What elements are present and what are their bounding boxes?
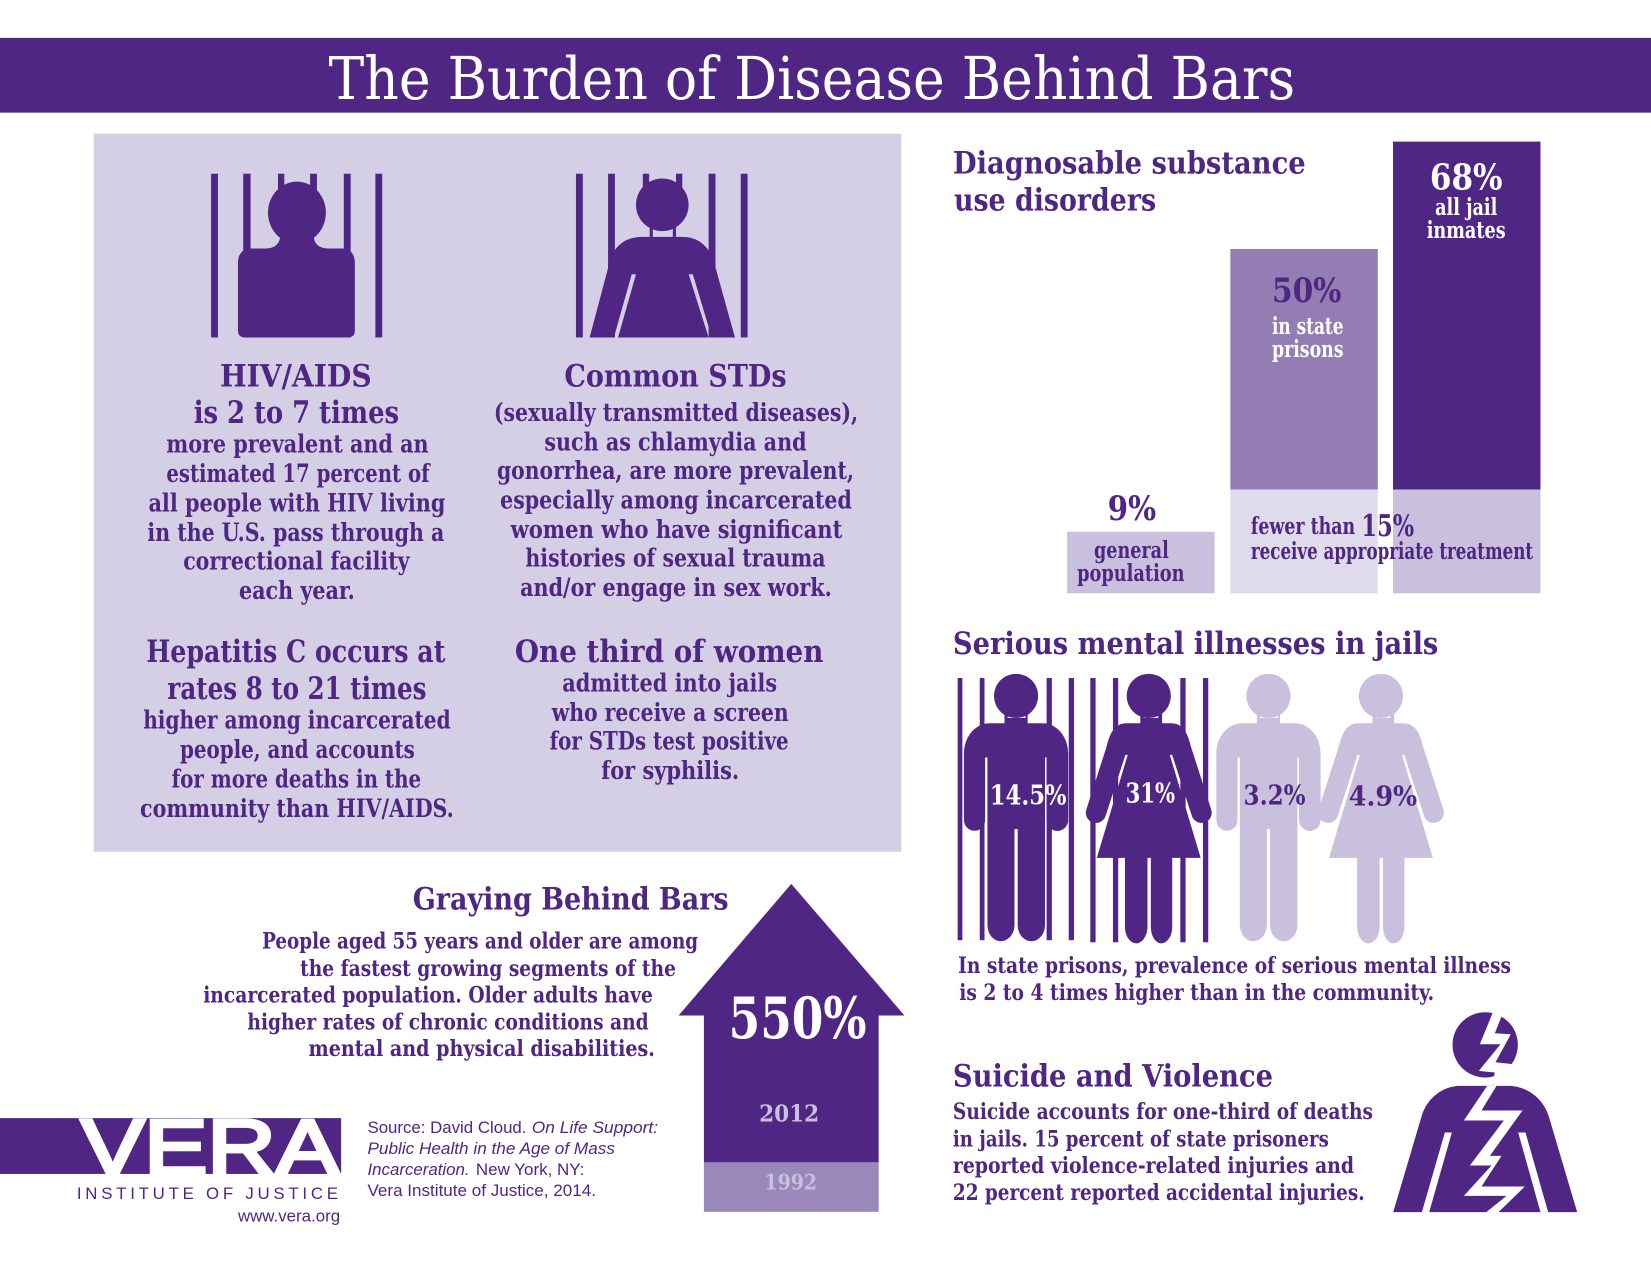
source citation: Public Health in the Age of Mass <box>367 1140 615 1158</box>
text block: common STDs: and/or engage in sex work. <box>520 573 832 602</box>
header banner <box>0 38 1651 113</box>
bar chart: substance use disorders <box>1067 142 1540 593</box>
bar: all jail inmates 68% <box>1393 142 1540 593</box>
icon: community man 3.2% <box>1216 674 1321 941</box>
heading: substance use disorders: use disorders <box>954 183 1156 219</box>
text block: suicide and violence: Suicide accounts for one-third of deaths <box>953 1099 1373 1125</box>
panel: disease prevalence <box>94 134 901 852</box>
callout: fewer than 15% treated <box>1251 508 1533 565</box>
arrow: 550% growth: 1992 <box>764 1170 817 1195</box>
arrow: 550% growth: 2012 <box>759 1100 819 1127</box>
text block: graying behind bars: higher rates of chronic conditions and <box>247 1010 649 1036</box>
icon: female prisoner behind bars <box>576 174 748 337</box>
text block: hepatitis C: for more deaths in the <box>172 765 421 794</box>
bar: state prisons 50%: in state <box>1272 313 1344 340</box>
text block: suicide and violence: 22 percent reported accidental injuries. <box>953 1180 1365 1206</box>
text block: graying behind bars: incarcerated population. Older adults have <box>203 982 653 1008</box>
source citation <box>367 1119 658 1200</box>
callout: fewer than 15% treated: receive appropriate treatment <box>1251 538 1533 565</box>
text block: common STDs: such as chlamydia and <box>544 428 807 457</box>
text block: HIV/AIDS: each year. <box>239 576 355 605</box>
icon: incarcerated man 14.5%: 14.5% <box>990 779 1067 811</box>
icon: incarcerated woman 31% <box>1086 674 1212 943</box>
logo: Vera Institute of Justice: www.vera.org <box>237 1207 340 1225</box>
bar: all jail inmates 68%: inmates <box>1427 217 1506 244</box>
icon: male prisoner behind bars <box>211 174 382 337</box>
text block: HIV/AIDS: more prevalent and an <box>166 430 429 459</box>
text block: syphilis screening: for STDs test positive <box>550 727 789 756</box>
text block: HIV/AIDS: estimated 17 percent of <box>166 459 431 488</box>
arrow: 550% growth <box>679 884 904 1212</box>
text block: hepatitis C: rates 8 to 21 times <box>167 671 426 707</box>
icon: community man 3.2%: 3.2% <box>1244 779 1306 811</box>
text block: common STDs: Common STDs <box>564 358 787 394</box>
title: The Burden of Disease Behind Bars <box>329 44 1295 113</box>
bar: general population 9%: 9% <box>1108 488 1156 528</box>
text block: graying behind bars <box>203 882 729 1062</box>
prison bars <box>958 678 1208 942</box>
text block: syphilis screening: admitted into jails <box>562 669 777 698</box>
text block: common STDs: especially among incarcerated <box>500 486 852 515</box>
logo: Vera Institute of Justice: VERA <box>81 1103 339 1191</box>
text block: suicide and violence: in jails. 15 percent of state prisoners <box>953 1127 1329 1153</box>
icon: person with lightning bolt <box>1393 1010 1577 1212</box>
text block: HIV/AIDS: correctional facility <box>183 547 411 576</box>
heading: serious mental illnesses: Serious mental illnesses in jails <box>953 626 1438 662</box>
text block: HIV/AIDS <box>147 358 446 605</box>
text block: hepatitis C: higher among incarcerated <box>143 706 451 735</box>
text block: state prison prevalence <box>958 953 1511 1006</box>
text block: HIV/AIDS: HIV/AIDS <box>220 358 372 394</box>
text block: common STDs: gonorrhea, are more prevalent, <box>497 456 854 485</box>
source citation: Source: David Cloud. <box>367 1119 526 1137</box>
callout: fewer than 15% treated: 15% <box>1361 508 1414 543</box>
bar: all jail inmates 68%: 68% <box>1430 157 1503 199</box>
text block: hepatitis C: people, and accounts <box>180 735 415 764</box>
bar: state prisons 50%: prisons <box>1272 336 1344 363</box>
bar: general population 9%: general <box>1094 537 1169 564</box>
logo: Vera Institute of Justice <box>0 1103 341 1225</box>
bar: general population 9% <box>1067 488 1215 593</box>
arrow: 550% growth: 550% <box>729 986 867 1052</box>
bar: all jail inmates 68%: all jail <box>1435 194 1497 221</box>
source citation: New York, NY: <box>476 1161 584 1179</box>
source citation: Incarceration. <box>367 1161 470 1179</box>
icon: incarcerated man 14.5% <box>964 674 1068 941</box>
text block: syphilis screening: who receive a screen <box>551 698 789 727</box>
text block: state prison prevalence: is 2 to 4 times higher than in the community. <box>959 980 1434 1006</box>
text block: HIV/AIDS: all people with HIV living <box>148 489 446 518</box>
text block: graying behind bars: Graying Behind Bars <box>413 882 729 918</box>
text block: syphilis screening: for syphilis. <box>601 756 739 785</box>
text block: HIV/AIDS: is 2 to 7 times <box>194 395 399 431</box>
text block: suicide and violence: Suicide and Violence <box>953 1059 1273 1095</box>
icon: community woman 4.9%: 4.9% <box>1349 780 1417 812</box>
source citation: Vera Institute of Justice, 2014. <box>367 1182 596 1200</box>
icon: community woman 4.9% <box>1318 674 1444 943</box>
text block: common STDs: women who have significant <box>510 515 843 544</box>
text block: state prison prevalence: In state prisons, prevalence of serious mental illness <box>958 953 1511 979</box>
heading: substance use disorders <box>953 146 1306 219</box>
source citation: On Life Support: <box>532 1119 658 1137</box>
text block: suicide and violence: reported violence-related injuries and <box>953 1153 1354 1179</box>
text block: hepatitis C <box>140 634 454 823</box>
text block: syphilis screening <box>515 634 823 785</box>
bar: state prisons 50%: 50% <box>1272 270 1342 310</box>
text block: suicide and violence <box>953 1059 1373 1206</box>
text block: HIV/AIDS: in the U.S. pass through a <box>147 518 444 547</box>
text block: graying behind bars: People aged 55 years and older are among <box>262 929 698 955</box>
text block: graying behind bars: the fastest growing segments of the <box>300 956 676 982</box>
text block: common STDs: (sexually transmitted diseases), <box>494 398 858 427</box>
logo: Vera Institute of Justice: INSTITUTE OF JUSTICE <box>77 1184 338 1203</box>
text block: hepatitis C: community than HIV/AIDS. <box>140 794 454 823</box>
bar: state prisons 50% <box>1230 249 1378 593</box>
text block: graying behind bars: mental and physical disabilities. <box>309 1036 655 1062</box>
text block: common STDs <box>494 358 858 602</box>
text block: hepatitis C: Hepatitis C occurs at <box>146 634 446 670</box>
text block: common STDs: histories of sexual trauma <box>525 543 826 572</box>
text block: syphilis screening: One third of women <box>515 634 823 670</box>
heading: substance use disorders: Diagnosable substance <box>953 146 1306 182</box>
icon: incarcerated woman 31%: 31% <box>1126 777 1175 809</box>
callout: fewer than 15% treated: fewer than <box>1251 513 1355 540</box>
bar: general population 9%: population <box>1077 560 1185 587</box>
pictogram chart: mental illness <box>958 674 1444 943</box>
